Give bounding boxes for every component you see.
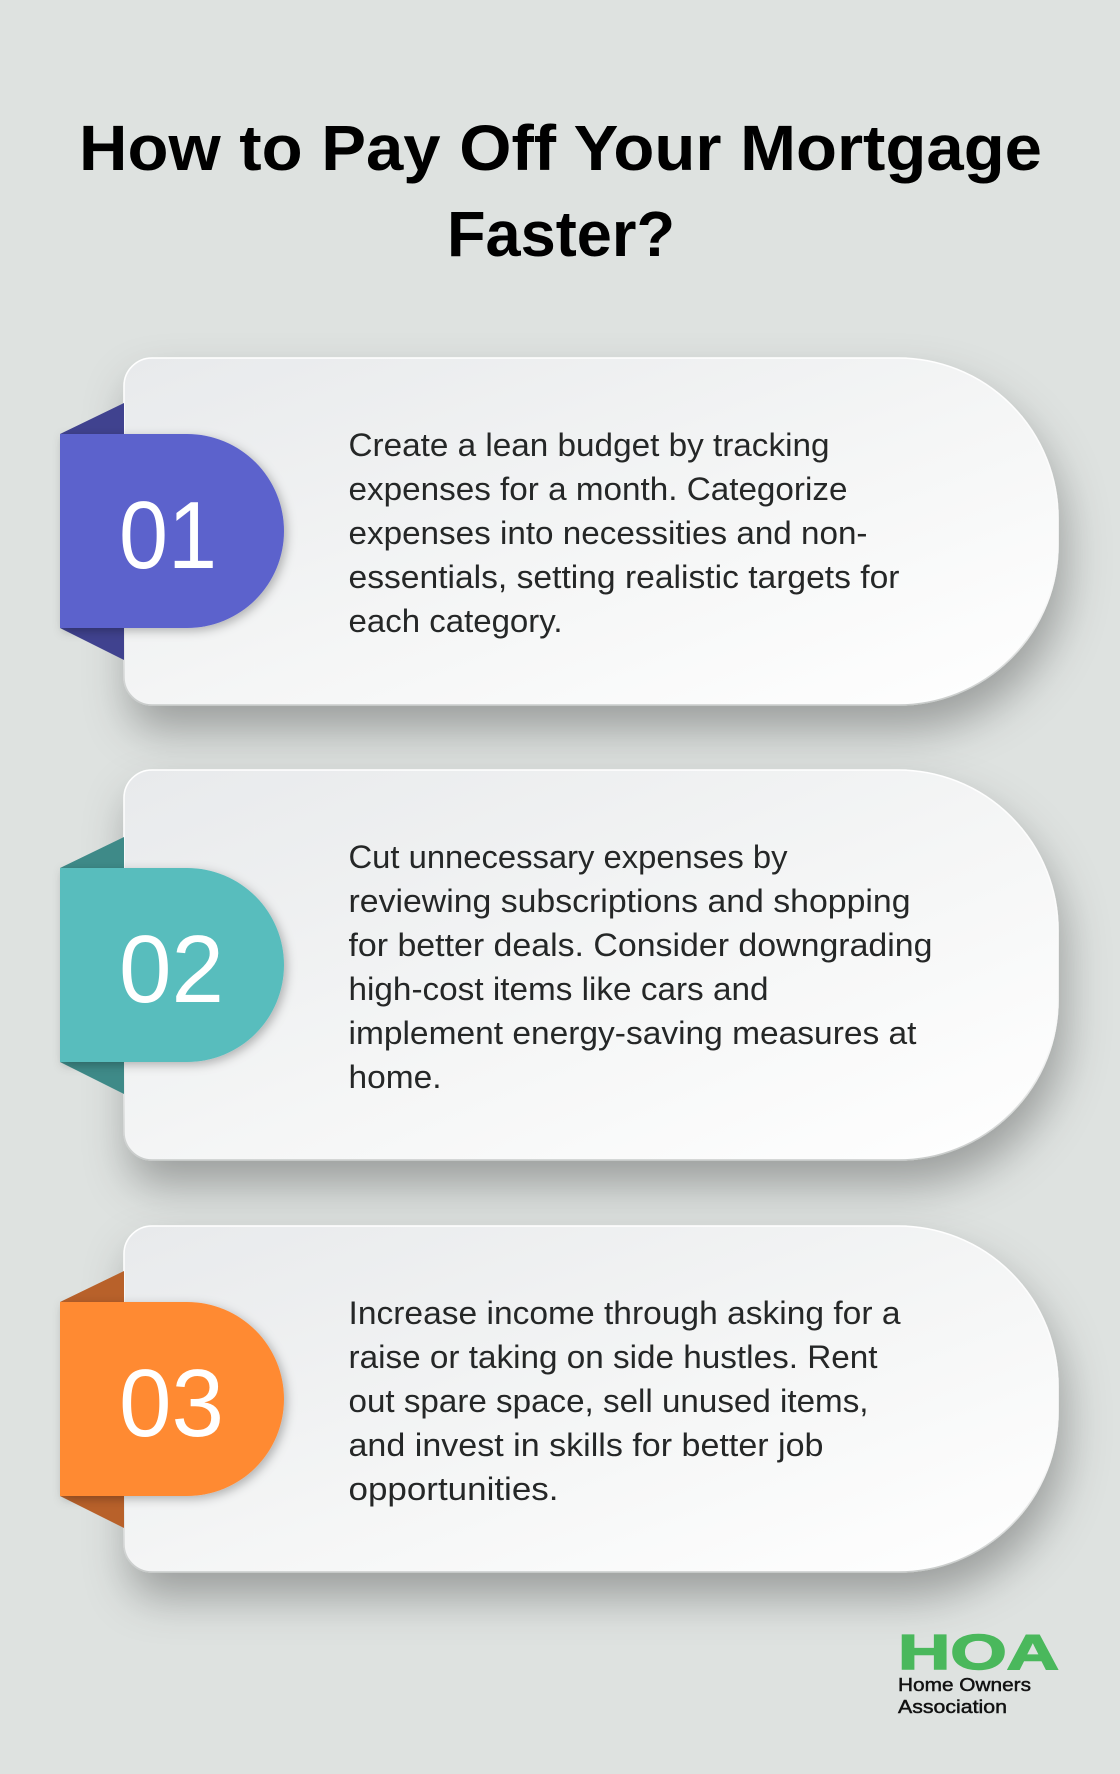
logo: HOA Home Owners Association: HOA [898,1626,1059,1680]
text: step 02 description: Cut unnecessary expenses by [348,839,788,875]
text: step 03 description: out spare space, sell unused items, [348,1383,868,1419]
text: step 01 description: expenses into necessities and non- [348,515,868,551]
text: step 01 description [348,427,900,639]
text: step 01 description: essentials, setting realistic targets for [348,559,900,595]
text: step 01 description: each category. [348,603,562,639]
card background 03 [124,1226,1058,1572]
card background 02 [124,770,1058,1160]
text: step 03 description: raise or taking on side hustles. Rent [348,1339,878,1375]
title [79,112,1042,270]
number 01: 01 [119,482,217,589]
title: Faster? [447,198,675,270]
panel: step 01 [60,358,1058,705]
text: step 02 description: reviewing subscriptions and shopping [348,883,910,919]
number 02: 02 [119,916,224,1023]
text: step 02 description: home. [348,1059,442,1095]
panel: step 02 [60,770,1058,1160]
ribbon fold 01 [60,403,124,660]
text: step 03 description: Increase income through asking for a [348,1295,901,1331]
ribbon fold 02 [60,837,124,1094]
text: step 02 description: high-cost items like cars and [348,971,768,1007]
logo: HOA Home Owners Association: Association [898,1697,1007,1717]
text: step 03 description: and invest in skills for better job [348,1427,824,1463]
text: step 01 description: Create a lean budget by tracking [348,427,830,463]
card background 01 [124,358,1058,705]
text: step 02 description [348,839,933,1095]
text: step 01 description: expenses for a month. Categorize [348,471,848,507]
number badge 03 [60,1302,284,1496]
number badge 01 [60,434,284,628]
text: step 02 description: implement energy-saving measures at [348,1015,916,1051]
text: step 03 description: opportunities. [348,1471,558,1507]
ribbon fold 03 [60,1271,124,1528]
title: How to Pay Off Your Mortgage [79,112,1042,184]
text: step 03 description [348,1295,901,1507]
logo: HOA Home Owners Association: Home Owners [898,1675,1031,1695]
number 03: 03 [119,1350,224,1457]
panel: step 03 [60,1226,1058,1572]
number badge 02 [60,868,284,1062]
text: step 02 description: for better deals. Consider downgrading [348,927,933,963]
logo: HOA Home Owners Association [898,1626,1059,1717]
